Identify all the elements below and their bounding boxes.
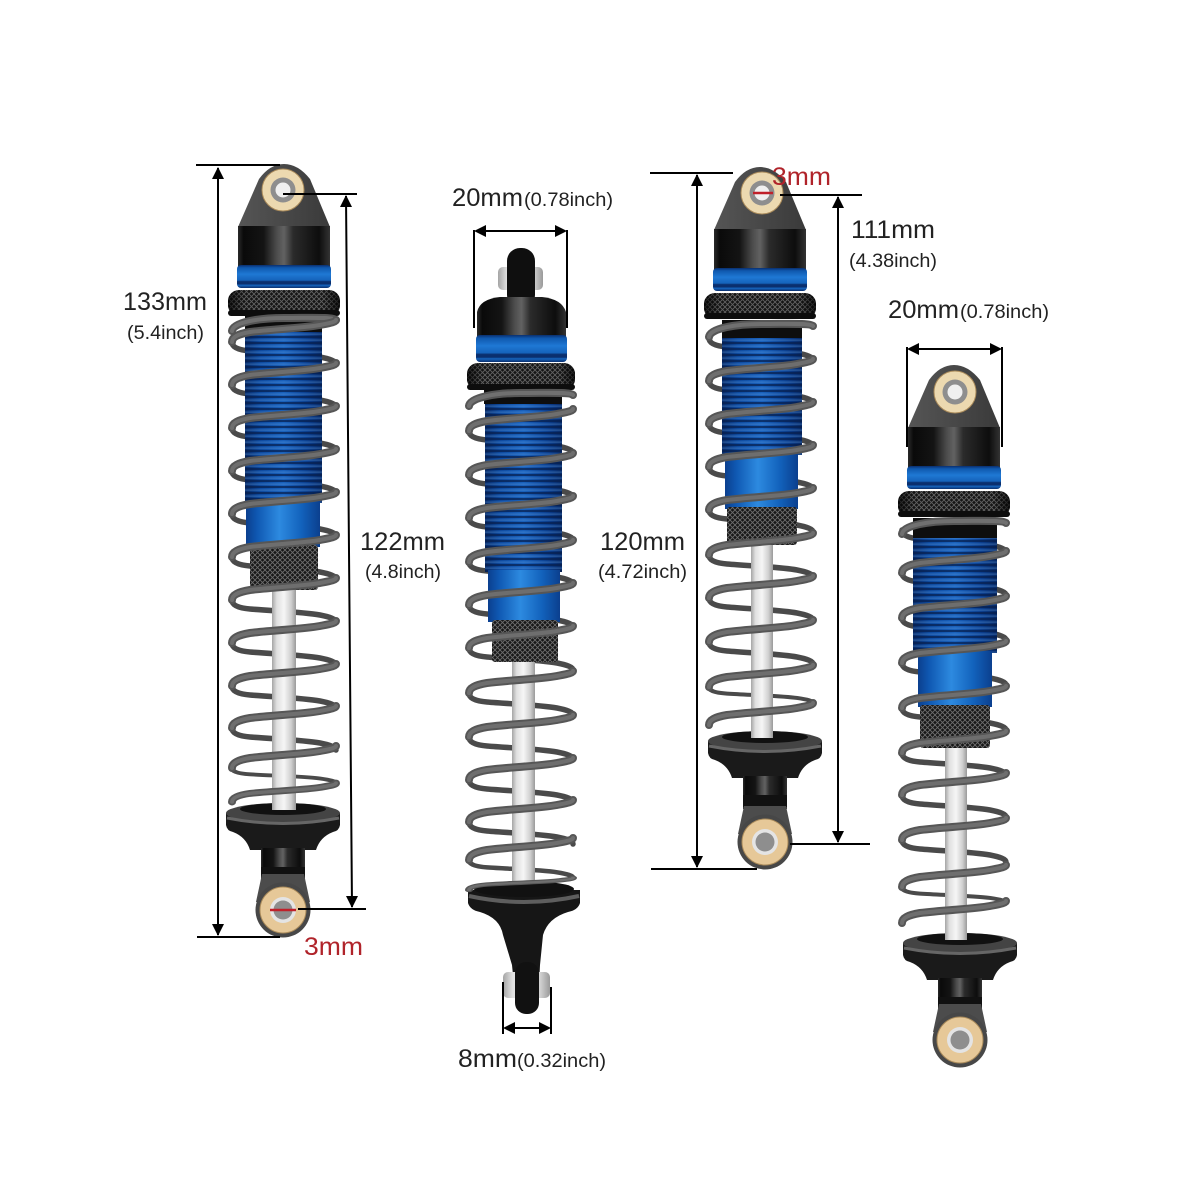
- dimension: 20mm cap width, shock 2: 20mm: [452, 184, 523, 212]
- dimension: 8mm pin width: (0.32inch): [517, 1051, 606, 1072]
- dimension: 111mm eye to eye: 111mm: [851, 216, 935, 244]
- bottom mount: [468, 881, 580, 1014]
- dimension: 20mm cap width, shock 4: 20mm: [888, 296, 959, 324]
- dimension: 20mm cap width, shock 4: (0.78inch): [960, 302, 1049, 323]
- dimension: 120mm overall length: (4.72inch): [598, 562, 687, 583]
- dimension: 8mm pin width: 8mm: [458, 1045, 517, 1073]
- dimension: 122mm eye to eye: [283, 194, 445, 909]
- dimension: 3mm hole, upper: [753, 163, 831, 193]
- shock absorber 1: [226, 164, 340, 938]
- dimension: 3mm hole, upper: 3mm: [772, 163, 831, 191]
- dimension: 133mm overall length: 133mm: [123, 288, 207, 316]
- dimension: 3mm hole, lower: 3mm: [304, 933, 363, 961]
- dimension: 120mm overall length: [598, 173, 757, 869]
- dimension: 133mm overall length: (5.4inch): [127, 323, 204, 344]
- dimension: 8mm pin width: [458, 982, 606, 1073]
- dimension: 20mm cap width, shock 4: [888, 296, 1049, 447]
- dimension: 111mm eye to eye: (4.38inch): [849, 251, 937, 272]
- top rod end: [498, 248, 543, 308]
- dimension: 111mm eye to eye: [780, 195, 937, 844]
- shock absorber 4: [898, 365, 1017, 1068]
- shock absorber 2: [467, 248, 580, 1014]
- dimension: 122mm eye to eye: 122mm: [360, 528, 445, 556]
- dimension: 20mm cap width, shock 2: (0.78inch): [524, 190, 613, 211]
- dimension: 120mm overall length: 120mm: [600, 528, 685, 556]
- dimension: 133mm overall length: [123, 165, 280, 937]
- dimension: 20mm cap width, shock 2: [452, 184, 613, 328]
- dimension: 122mm eye to eye: (4.8inch): [365, 562, 441, 583]
- shock absorber 3: [704, 167, 822, 870]
